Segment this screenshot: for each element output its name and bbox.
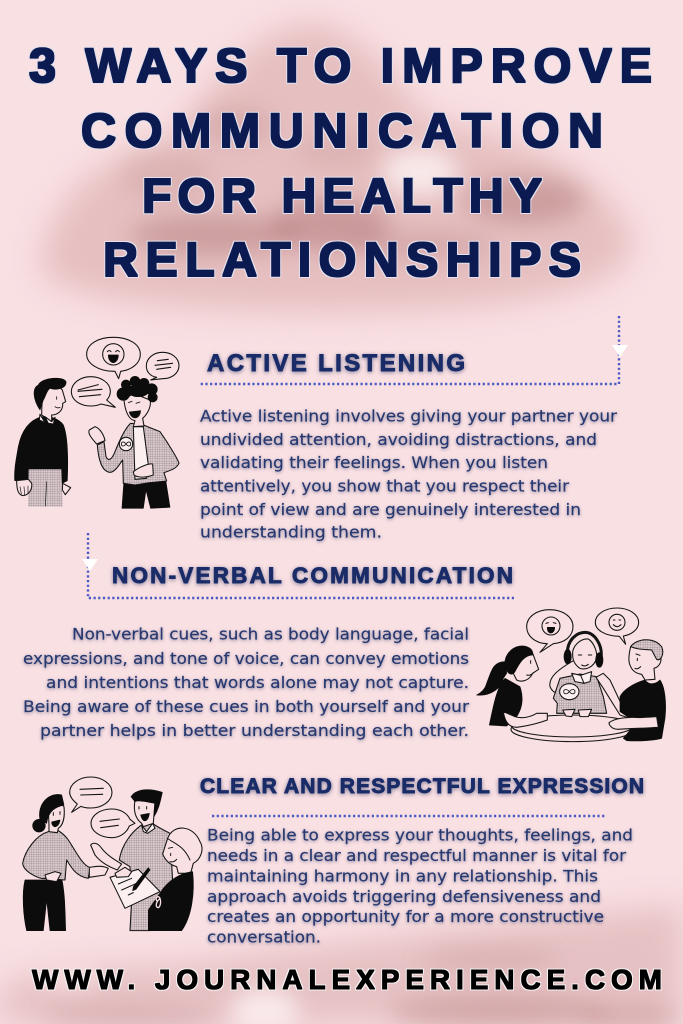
illustration: three people at a table xyxy=(477,608,666,742)
heading: active listening: ACTIVE LISTENING xyxy=(207,350,465,377)
body text: clear and respectful: Being able to express your thoughts, feelings, and xyxy=(207,826,633,844)
title: COMMUNICATION xyxy=(81,104,603,158)
title xyxy=(29,39,652,287)
speech bubble: upper xyxy=(70,777,112,812)
body text: clear and respectful: approach avoids triggering defensiveness and xyxy=(207,887,601,906)
title: RELATIONSHIPS xyxy=(103,233,581,287)
body text: active listening: attentively, you show that you respect their xyxy=(200,476,569,496)
body text: non-verbal: expressions, and tone of voice, can convey emotions xyxy=(23,649,469,668)
left woman with ponytail xyxy=(477,646,547,727)
speech bubble: lower xyxy=(91,809,135,838)
speech bubble: left xyxy=(71,377,115,407)
illustration: three people with clipboard xyxy=(23,777,202,931)
body text: non-verbal: Being aware of these cues in both yourself and your xyxy=(23,697,469,716)
body text: non-verbal: and intentions that words alone may not capture. xyxy=(46,673,469,692)
body text: active listening: validating their feelings. When you listen xyxy=(200,453,548,472)
connector arrow: active listening xyxy=(200,316,628,384)
middle woman with headphones xyxy=(550,632,607,717)
illustration: two men talking xyxy=(15,337,179,508)
connector arrow: non-verbal xyxy=(82,533,514,598)
body text: clear and respectful: maintaining harmony in any relationship. This xyxy=(207,866,598,886)
body text: clear and respectful: needs in a clear and respectful manner is vital for xyxy=(207,846,626,865)
body text: active listening: understanding them. xyxy=(200,522,382,542)
website footer: WWW. JOURNALEXPERIENCE.COM xyxy=(32,964,662,995)
man in centre xyxy=(91,790,173,931)
speech bubble: smiling face xyxy=(595,608,639,644)
speech bubble: laughing face xyxy=(527,610,573,652)
right man xyxy=(596,640,666,741)
right man with curly hair xyxy=(89,376,179,508)
title: 3 WAYS TO IMPROVE xyxy=(29,39,652,93)
body text: clear and respectful xyxy=(207,826,633,946)
body text: clear and respectful: conversation. xyxy=(207,928,321,946)
speech bubble: laughing face xyxy=(87,337,140,379)
body text: active listening: undivided attention, avoiding distractions, and xyxy=(200,430,597,449)
body text: clear and respectful: creates an opportunity for a more constructive xyxy=(207,907,604,926)
title: FOR HEALTHY xyxy=(142,169,542,223)
body text: active listening: Active listening involves giving your partner your xyxy=(200,406,617,426)
table xyxy=(511,715,634,742)
speech bubble: right xyxy=(146,352,179,380)
woman with bun xyxy=(23,794,108,931)
body text: active listening xyxy=(200,406,617,542)
divider line: clear and respectful xyxy=(212,815,606,817)
heading: non-verbal communication: NON-VERBAL COMMUNICATION xyxy=(112,563,513,588)
body text: non-verbal: partner helps in better understanding each other. xyxy=(40,721,469,740)
heading: clear and respectful expression: CLEAR AND RESPECTFUL EXPRESSION xyxy=(200,775,644,798)
body text: non-verbal: Non-verbal cues, such as body language, facial xyxy=(72,624,469,644)
left man xyxy=(15,378,71,507)
body text: active listening: point of view and are genuinely interested in xyxy=(200,500,581,519)
body text: non-verbal xyxy=(23,624,469,740)
front person with clipboard xyxy=(110,828,202,931)
